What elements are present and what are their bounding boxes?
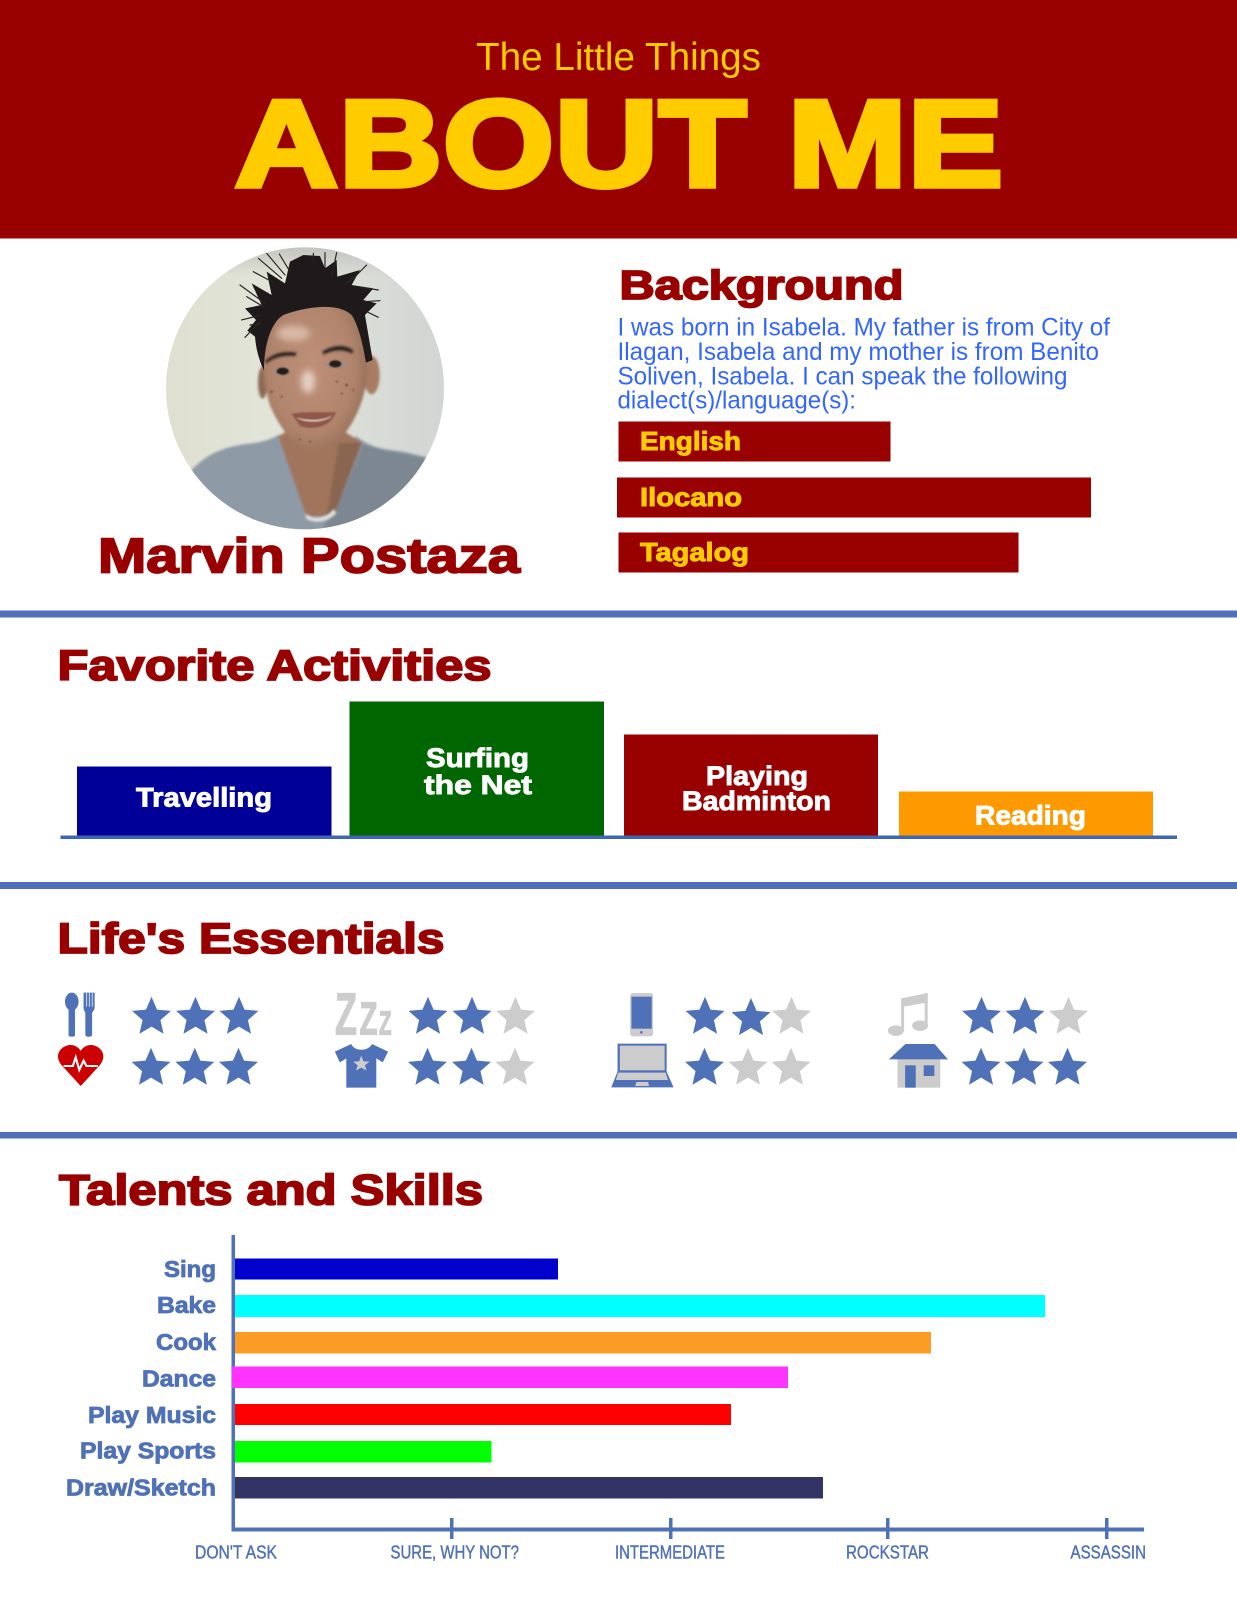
language bar: Ilocano: Ilocano: [640, 482, 742, 512]
icon: heart: [58, 1045, 103, 1086]
language bar: Tagalog: [618, 532, 1018, 572]
skin highlights: [277, 325, 315, 393]
bar: Dance: Dance: [142, 1366, 216, 1392]
icon: smartphone: [630, 993, 653, 1036]
icon: spoon and fork: [65, 993, 95, 1037]
activity block: Reading: Reading: [975, 800, 1086, 830]
activity block: Surfing the Net: [350, 702, 604, 836]
axis labels: ASSASSIN: [1070, 1542, 1146, 1562]
activity block: Surfing the Net: Surfing: [426, 743, 529, 773]
panel: talents and skills: [59, 1166, 1146, 1562]
background paragraph: [618, 314, 1110, 414]
background paragraph: I was born in Isabela. My father is from City of: [618, 314, 1110, 342]
bar: Bake: [157, 1292, 1045, 1318]
heading: favorite activities: Favorite Activities: [58, 642, 492, 690]
activity block: Reading: [899, 792, 1153, 836]
name: Marvin Postaza: [98, 530, 521, 584]
stars: music: [962, 997, 1088, 1034]
background paragraph: Soliven, Isabela. I can speak the following: [618, 362, 1068, 390]
panel: background: [617, 262, 1110, 572]
heading: talents and skills: Talents and Skills: [59, 1166, 483, 1214]
subtitle: The Little Things: [476, 36, 761, 79]
stars: sleep: [408, 997, 535, 1034]
bar: Play Sports: Play Sports: [80, 1438, 216, 1464]
bar: Dance: [142, 1366, 788, 1392]
activity block: Playing Badminton: [624, 734, 878, 836]
icon: house: [889, 1044, 948, 1088]
icon: t-shirt: [335, 1044, 388, 1088]
icon: music note: [888, 993, 928, 1036]
stars: health: [132, 1048, 258, 1085]
heading: background: Background: [620, 262, 904, 308]
background paragraph: Ilagan, Isabela and my mother is from Benito: [618, 338, 1099, 366]
stars: food: [132, 997, 258, 1034]
bar: Sing: Sing: [164, 1256, 216, 1282]
axis labels: SURE, WHY NOT?: [390, 1542, 519, 1562]
hair: [240, 253, 380, 371]
bar: Cook: Cook: [156, 1329, 216, 1355]
axis labels: DON'T ASK: [195, 1542, 277, 1562]
language bar: English: English: [640, 426, 741, 456]
activity block: Playing Badminton: Playing: [706, 761, 808, 791]
stars: laptop: [685, 1048, 810, 1085]
icon: sleep: Z: [379, 1004, 392, 1042]
icon: sleep: Z: [335, 982, 357, 1048]
activity block: Travelling: Travelling: [136, 782, 272, 812]
bar: Play Music: Play Music: [88, 1402, 216, 1428]
activity block: Surfing the Net: the Net: [424, 770, 532, 800]
bar: Draw/Sketch: [66, 1474, 823, 1500]
activity block: Playing Badminton: Badminton: [682, 786, 831, 816]
stars: clothing: [408, 1048, 534, 1085]
bar: Play Sports: [80, 1438, 492, 1464]
activity baseline: [60, 836, 1177, 839]
stars: phone: [686, 997, 811, 1035]
activity block: Travelling: [77, 766, 332, 836]
bar: Play Music: [88, 1402, 731, 1428]
icon: sleep: [335, 982, 392, 1048]
bar: Bake: Bake: [157, 1292, 216, 1318]
background paragraph: dialect(s)/language(s):: [618, 386, 856, 414]
axis labels: ROCKSTAR: [846, 1542, 929, 1562]
language bar: Tagalog: Tagalog: [640, 537, 749, 567]
profile photo: [166, 247, 444, 530]
language bar: English: [618, 422, 890, 462]
heading: life's essentials: Life's Essentials: [58, 915, 445, 963]
bar chart: skills: [66, 1235, 1146, 1562]
bar: Draw/Sketch: Draw/Sketch: [66, 1474, 216, 1500]
panel: favorite activities: [58, 642, 1177, 839]
icon: sleep: Z: [360, 992, 378, 1044]
bar: Sing: [164, 1256, 558, 1282]
axis labels: [195, 1542, 1146, 1562]
title: ABOUT ME: [235, 76, 1004, 213]
axis labels: INTERMEDIATE: [615, 1542, 725, 1562]
stars: home: [962, 1048, 1087, 1085]
panel: life's essentials: [58, 915, 1088, 1088]
header banner: [0, 0, 1237, 238]
icon: laptop: [611, 1044, 674, 1087]
bar: Cook: [156, 1329, 931, 1355]
language bar: Ilocano: [617, 478, 1091, 518]
